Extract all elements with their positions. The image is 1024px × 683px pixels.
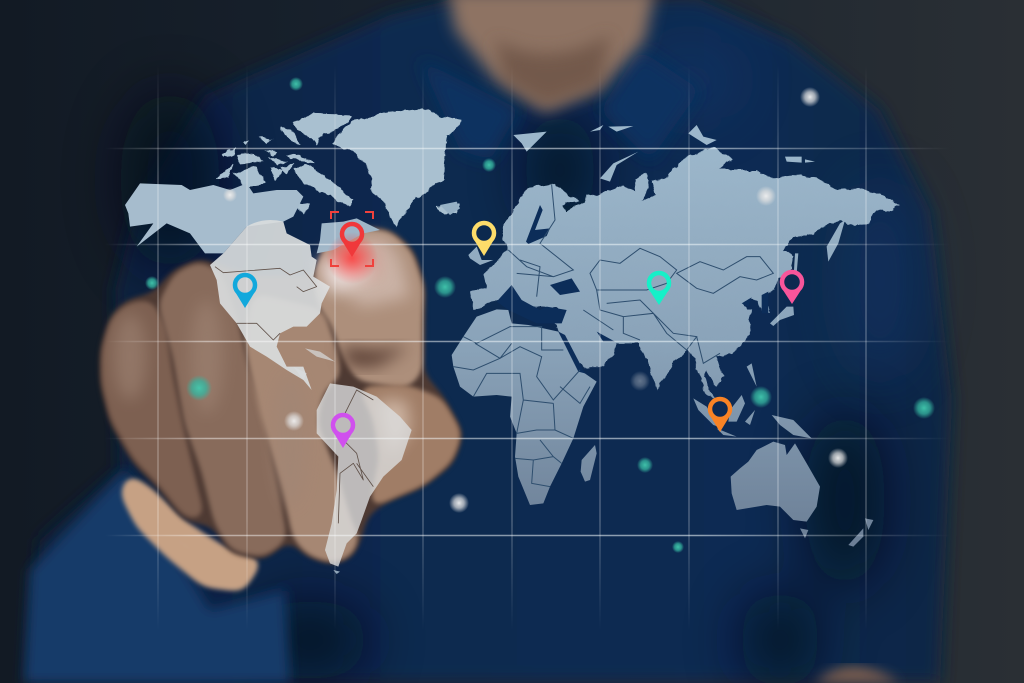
pin: red — [341, 224, 363, 257]
American borders — [215, 267, 373, 523]
Quebec glow over finger — [317, 260, 373, 293]
red target glow — [326, 232, 378, 284]
pin: turquoise — [648, 273, 670, 305]
pin: magenta — [332, 415, 354, 448]
shirt lighter area — [640, 40, 920, 380]
thumb highlight — [377, 400, 410, 457]
USA Mexico over hand — [210, 220, 330, 390]
white dots — [223, 87, 848, 513]
target brackets — [331, 212, 373, 266]
pin: orange — [709, 399, 731, 432]
little finger — [103, 300, 205, 520]
Alaska and northern Canada — [125, 183, 303, 253]
glowing dots — [145, 77, 935, 553]
world map — [125, 108, 900, 574]
seas — [497, 205, 768, 342]
Caribbean — [293, 348, 335, 380]
Africa — [452, 309, 597, 505]
face — [448, 0, 655, 112]
index highlight — [333, 237, 410, 307]
red tint on finger — [323, 247, 380, 280]
wrist — [120, 473, 263, 592]
Red Sea — [558, 332, 585, 373]
index finger — [315, 228, 423, 388]
grid lines — [105, 65, 950, 630]
islands — [440, 125, 873, 547]
fist base — [100, 227, 463, 565]
hand — [100, 227, 463, 592]
index shadow crease — [340, 347, 410, 367]
shirt shadow folds — [120, 90, 885, 683]
map: Americas and Greenland — [125, 108, 462, 574]
collar — [420, 50, 700, 160]
South America — [317, 383, 412, 567]
pin: pink — [781, 272, 803, 304]
chin shadow — [495, 35, 610, 105]
little and ring finger highlights — [113, 300, 307, 507]
middle finger — [245, 293, 359, 563]
eastern Canada — [317, 218, 380, 253]
pin: yellow — [473, 223, 495, 256]
Eurasia — [470, 148, 900, 400]
pin: blue — [234, 275, 256, 308]
country borders — [453, 185, 773, 487]
thumb — [357, 385, 462, 512]
sleeve cuff — [24, 470, 290, 683]
South America tip — [333, 570, 340, 574]
teal dots — [145, 77, 935, 553]
ring finger — [158, 262, 287, 557]
lower hand of right side — [815, 666, 900, 683]
map: Eurasia Africa Oceania — [440, 125, 900, 547]
Greenland and Arctic islands — [216, 108, 462, 228]
